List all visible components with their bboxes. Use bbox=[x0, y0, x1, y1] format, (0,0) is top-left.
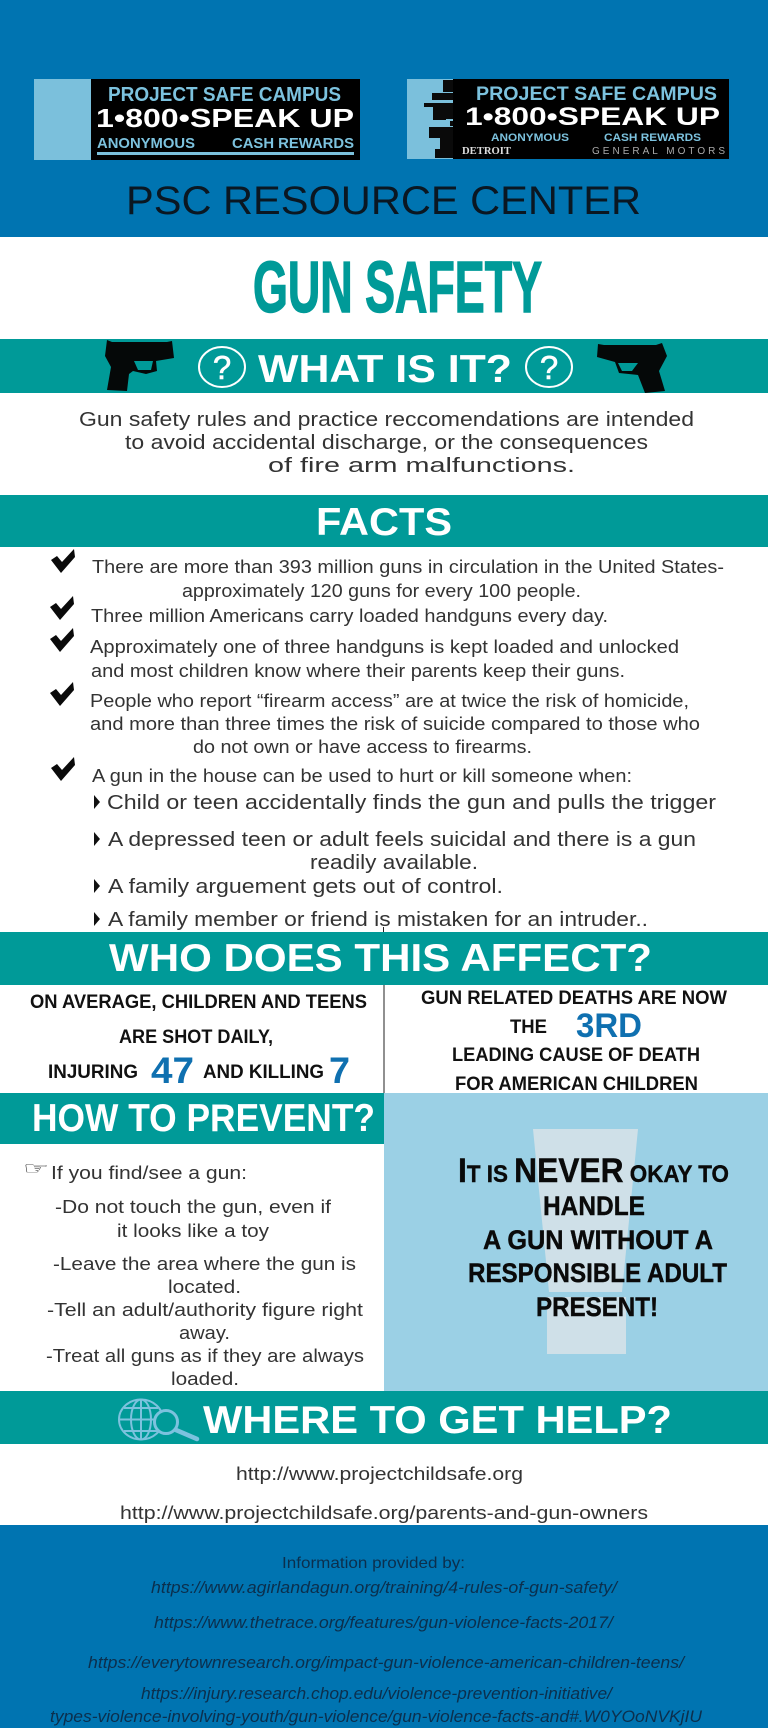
icon: right question circle bbox=[526, 347, 572, 387]
footer panel: sources: https://everytownresearch.org/impact-gun-violence-american-children-teens/ bbox=[88, 1653, 686, 1672]
sub-list: when a gun can hurt: A family member or friend is mistaken for an intruder.. bbox=[108, 908, 648, 931]
panel: statistics leading cause bbox=[421, 988, 727, 1095]
icon: right handgun bbox=[597, 343, 667, 393]
sub-list: when a gun can hurt: A depressed teen or adult feels suicidal and there is a gun bbox=[108, 828, 696, 851]
panel: statistics daily shootings: 47 bbox=[151, 1050, 194, 1091]
panel: how to prevent steps: it looks like a toy bbox=[117, 1220, 270, 1241]
icon: right question circle: ? bbox=[540, 349, 558, 386]
warning text: PRESENT! bbox=[536, 1292, 658, 1322]
warning text: IT IS NEVER OKAY TO bbox=[458, 1152, 729, 1190]
section band: Who does this affect: WHO DOES THIS AFFECT? bbox=[109, 937, 652, 980]
logo: Project Safe Campus: 1•800•SPEAK UP bbox=[96, 103, 354, 133]
icon: globe with magnifier bbox=[119, 1400, 197, 1440]
logo: Project Safe Campus Detroit bbox=[407, 79, 729, 159]
footer panel: sources: Information provided by: bbox=[282, 1555, 465, 1572]
title: Gun Safety: GUN SAFETY bbox=[253, 248, 542, 328]
warning text: HANDLE bbox=[543, 1191, 645, 1221]
panel: statistics leading cause: FOR AMERICAN CHILDREN bbox=[455, 1074, 698, 1095]
panel: statistics daily shootings: AND KILLING bbox=[203, 1062, 324, 1083]
logo: Project Safe Campus: ANONYMOUS bbox=[97, 135, 195, 152]
panel: statistics daily shootings: INJURING bbox=[48, 1062, 138, 1083]
header panel bbox=[0, 0, 768, 237]
panel: facts list bbox=[50, 549, 724, 931]
fact 4: and more than three times the risk of suicide compared to those who bbox=[90, 713, 700, 734]
icon: check 1 bbox=[51, 549, 75, 573]
panel: statistics leading cause: GUN RELATED DEATHS ARE NOW bbox=[421, 988, 727, 1009]
icon: left question circle: ? bbox=[213, 349, 231, 386]
logo: Project Safe Campus: CASH REWARDS bbox=[232, 135, 354, 152]
section band: Where to get help: WHERE TO GET HELP? bbox=[203, 1399, 672, 1442]
panel: statistics daily shootings: 7 bbox=[329, 1050, 350, 1091]
fact 3: Approximately one of three handguns is kept loaded and unlocked bbox=[90, 636, 679, 657]
section band: Facts: FACTS bbox=[316, 501, 452, 544]
panel: statistics daily shootings: ARE SHOT DAILY, bbox=[119, 1027, 273, 1048]
text block: help links: http://www.projectchildsafe.org bbox=[236, 1464, 523, 1484]
logo: Project Safe Campus Detroit: GENERAL MOTORS bbox=[592, 146, 725, 157]
sub-list: when a gun can hurt: A family arguement gets out of control. bbox=[108, 875, 503, 898]
icon: check 3 bbox=[50, 628, 74, 652]
panel: statistics daily shootings: ON AVERAGE, CHILDREN AND TEENS bbox=[30, 992, 367, 1013]
panel: how to prevent steps: If you find/see a gun: bbox=[51, 1162, 247, 1183]
sub-list: when a gun can hurt bbox=[94, 791, 716, 931]
logo: Project Safe Campus bbox=[34, 79, 360, 160]
footer panel: sources: types-violence-involving-youth/gun-violence/gun-violence-facts-and#.W0YOoNVKjIU bbox=[50, 1707, 703, 1726]
icon: left handgun bbox=[105, 340, 174, 391]
text block: definition: to avoid accidental discharge, or the consequences bbox=[125, 432, 648, 454]
text block: help links: http://www.projectchildsafe.org/parents-and-gun-owners bbox=[120, 1503, 648, 1523]
icon: left question circle bbox=[199, 347, 245, 387]
heading: PSC Resource Center: PSC RESOURCE CENTER bbox=[126, 179, 641, 223]
logo: Project Safe Campus: PROJECT SAFE CAMPUS bbox=[108, 84, 341, 106]
logo: Project Safe Campus Detroit: 1•800•SPEAK UP bbox=[465, 103, 720, 131]
panel: statistics daily shootings bbox=[30, 992, 367, 1091]
icon: Detroit skyline bbox=[424, 80, 455, 158]
icon: check 2 bbox=[50, 596, 74, 620]
text block: definition: Gun safety rules and practice reccomendations are intended bbox=[79, 409, 694, 431]
icon: exclamation mark bbox=[533, 1129, 638, 1354]
footer panel: sources: https://injury.research.chop.edu/violence-prevention-initiative/ bbox=[141, 1684, 614, 1703]
panel: how to prevent steps: loaded. bbox=[171, 1368, 239, 1389]
fact 2: Three million Americans carry loaded handguns every day. bbox=[91, 605, 608, 626]
fact 4 bbox=[90, 690, 700, 757]
panel: warning callout bbox=[384, 1093, 768, 1391]
heading: What is it: WHAT IS IT? bbox=[258, 348, 512, 391]
icon: pointing hand: ☞ bbox=[23, 1159, 49, 1179]
sub-list: when a gun can hurt: Child or teen accidentally finds the gun and pulls the trigger bbox=[107, 791, 716, 814]
icon: check 5 bbox=[51, 757, 75, 781]
panel: how to prevent steps: -Do not touch the gun, even if bbox=[55, 1196, 332, 1217]
fact 4: do not own or have access to firearms. bbox=[193, 736, 532, 757]
panel: how to prevent steps: located. bbox=[168, 1276, 241, 1297]
panel: how to prevent steps: -Leave the area where the gun is bbox=[53, 1253, 356, 1274]
section band: How to prevent: HOW TO PREVENT? bbox=[32, 1097, 375, 1140]
fact 4: People who report “firearm access” are at twice the risk of homicide, bbox=[90, 690, 689, 711]
section band: Who does this affect bbox=[0, 927, 768, 985]
fact 3 bbox=[90, 636, 679, 681]
section band: Facts bbox=[0, 495, 768, 547]
footer panel: sources: https://www.thetrace.org/features/gun-violence-facts-2017/ bbox=[154, 1613, 615, 1632]
fact 1 bbox=[92, 556, 724, 601]
text block: definition bbox=[79, 409, 694, 477]
panel: how to prevent steps: away. bbox=[179, 1322, 230, 1343]
logo: Project Safe Campus Detroit: ANONYMOUS bbox=[491, 132, 569, 144]
section band: Where to get help bbox=[0, 1391, 768, 1444]
warning text: A GUN WITHOUT A bbox=[483, 1225, 713, 1255]
fact 1: There are more than 393 million guns in circulation in the United States- bbox=[92, 556, 724, 577]
fact 3: and most children know where their parents keep their guns. bbox=[91, 660, 625, 681]
warning text bbox=[458, 1152, 729, 1322]
fact 1: approximately 120 guns for every 100 people. bbox=[182, 580, 581, 601]
panel: how to prevent steps: -Treat all guns as if they are always bbox=[46, 1345, 364, 1366]
panel: statistics leading cause: LEADING CAUSE OF DEATH bbox=[452, 1045, 700, 1066]
warning text: RESPONSIBLE ADULT bbox=[468, 1258, 727, 1288]
panel: statistics leading cause: 3RD bbox=[576, 1007, 642, 1045]
logo: Project Safe Campus Detroit: PROJECT SAFE CAMPUS bbox=[476, 84, 717, 105]
fact 5: A gun in the house can be used to hurt or kill someone when: bbox=[92, 765, 632, 786]
panel: statistics leading cause: THE bbox=[510, 1017, 547, 1038]
footer panel: sources bbox=[0, 1525, 768, 1728]
footer panel: sources: https://www.agirlandagun.org/training/4-rules-of-gun-safety/ bbox=[151, 1578, 619, 1597]
icon: check 4 bbox=[50, 682, 74, 706]
panel: how to prevent steps: -Tell an adult/authority figure right bbox=[47, 1299, 363, 1320]
section band: What is it bbox=[0, 339, 768, 393]
panel: how to prevent steps bbox=[23, 1159, 364, 1389]
text block: help links bbox=[120, 1464, 648, 1523]
logo: Project Safe Campus Detroit: DETROIT bbox=[462, 146, 511, 157]
text block: definition: of fire arm malfunctions. bbox=[268, 455, 575, 477]
sub-list: when a gun can hurt: readily available. bbox=[310, 851, 478, 874]
logo: Project Safe Campus Detroit: CASH REWARDS bbox=[604, 132, 701, 144]
